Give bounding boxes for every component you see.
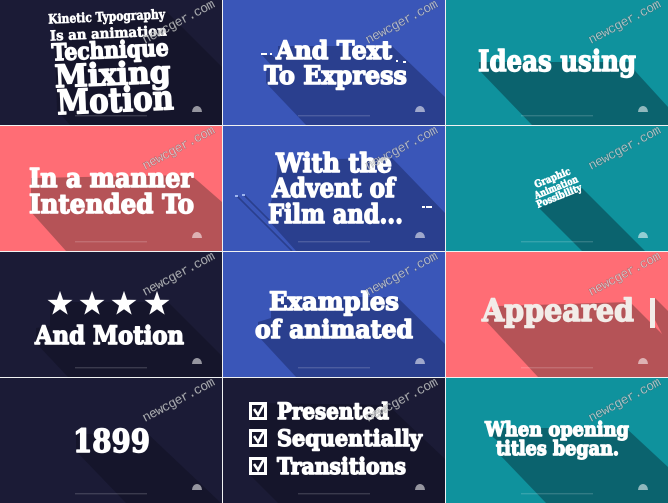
panel: kinetic typography <box>0 0 222 125</box>
panel: stars and motion <box>0 249 222 377</box>
watermark: newcger.com <box>140 123 218 174</box>
heading <box>268 149 403 230</box>
logo <box>415 232 425 238</box>
panel: with the advent of film <box>223 123 445 251</box>
heading: With the <box>275 149 392 179</box>
checklist text <box>277 399 423 480</box>
heading: Appeared <box>481 293 634 329</box>
rotated heading: Animation <box>532 174 580 202</box>
panel: 1899 <box>0 375 222 503</box>
panel: opening titles <box>446 375 668 503</box>
rotated heading <box>532 166 585 211</box>
heading: of animated <box>255 315 413 344</box>
rotated heading: Graphic <box>533 166 572 191</box>
footer note <box>521 241 593 242</box>
motion dashes <box>261 53 406 63</box>
checklist text: Transitions <box>277 454 406 480</box>
logo <box>638 106 648 112</box>
logo <box>638 358 648 364</box>
logo <box>415 484 425 490</box>
footer note <box>75 367 147 368</box>
footer note <box>298 367 370 368</box>
panel: checklist <box>223 375 445 503</box>
checklist text: Presented <box>277 399 389 425</box>
heading: When opening <box>484 417 629 441</box>
footer note <box>521 115 593 116</box>
panel: in a manner <box>0 123 222 251</box>
long shadow <box>479 62 668 125</box>
panel: ideas using <box>446 0 668 125</box>
heading: And Motion <box>34 321 184 350</box>
footer note <box>521 493 593 494</box>
long shadow <box>266 46 445 125</box>
logo <box>415 358 425 364</box>
heading: Advent of <box>271 174 397 204</box>
cursor <box>650 298 655 328</box>
watermark: newcger.com <box>363 249 441 300</box>
long shadow <box>258 297 445 377</box>
heading: In a manner <box>29 164 193 194</box>
long shadow <box>484 302 668 377</box>
logo <box>192 232 202 238</box>
motion dashes <box>422 206 432 208</box>
watermark: newcger.com <box>140 249 218 300</box>
heading: Intended To <box>29 190 194 220</box>
checkbox: presented <box>250 404 266 418</box>
footer note <box>75 115 147 116</box>
heading: Film and... <box>268 200 403 230</box>
heading: kinetic lines: Kinetic Typography <box>48 8 166 28</box>
footer note <box>75 241 147 242</box>
heading: Ideas using <box>478 44 636 78</box>
heading <box>255 287 413 344</box>
heading: titles began. <box>496 436 619 460</box>
checklist text: Sequentially <box>277 426 423 452</box>
long shadow <box>76 434 222 503</box>
heading: kinetic lines <box>48 7 175 124</box>
footer note <box>298 241 370 242</box>
footer note <box>298 493 370 494</box>
checkbox: transitions <box>250 458 266 474</box>
panel: graphic animation possibility <box>446 123 668 251</box>
heading: kinetic lines: Technique <box>51 34 169 67</box>
watermark: newcger.com <box>363 123 441 174</box>
panel: and text to express <box>223 0 445 125</box>
watermark: newcger.com <box>586 375 664 426</box>
long shadow <box>539 188 645 251</box>
heading: kinetic lines: Motion <box>56 78 175 123</box>
cursor shadow <box>650 298 668 346</box>
heading <box>484 417 629 460</box>
heading: Examples <box>269 287 399 316</box>
long shadow <box>54 10 222 125</box>
watermark: newcger.com <box>363 375 441 426</box>
panel: appeared <box>446 249 668 377</box>
watermark: newcger.com <box>586 249 664 300</box>
heading <box>29 164 194 220</box>
checkbox: sequentially <box>250 430 266 446</box>
dash shadow <box>262 55 292 75</box>
long shadow <box>250 403 445 503</box>
long shadow <box>270 158 445 251</box>
footer note <box>75 493 147 494</box>
long shadow <box>31 175 222 251</box>
panel: examples of animated <box>223 249 445 377</box>
footer note <box>521 367 593 368</box>
streak shadows <box>237 195 300 251</box>
heading <box>264 36 407 90</box>
rotated heading: Possibility <box>535 182 585 211</box>
year: 1899 <box>73 422 150 460</box>
logo <box>192 484 202 490</box>
logo <box>638 232 648 238</box>
heading: kinetic lines: Mixing <box>54 54 171 95</box>
long shadow <box>36 302 222 377</box>
logo <box>415 106 425 112</box>
logo <box>638 484 648 490</box>
heading: To Express <box>264 61 407 90</box>
heading: kinetic lines: Is an animation <box>50 24 167 45</box>
logo <box>192 358 202 364</box>
watermark: newcger.com <box>586 123 664 174</box>
heading: And Text <box>275 36 392 65</box>
logo <box>192 106 202 112</box>
watermark: newcger.com <box>140 375 218 426</box>
stars <box>48 291 169 315</box>
long shadow <box>489 428 668 503</box>
footer note <box>298 115 370 116</box>
